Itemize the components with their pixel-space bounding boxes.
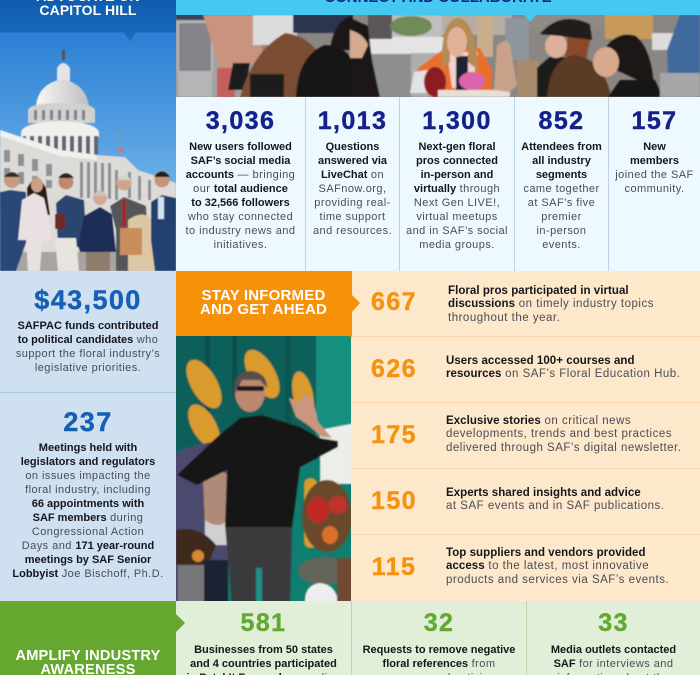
row: 115	[372, 547, 669, 586]
description: developments, trends and best practices	[446, 428, 672, 440]
description: Users accessed 100+ courses and	[446, 355, 635, 367]
number: 667	[371, 288, 417, 316]
description	[521, 141, 602, 251]
description	[448, 285, 654, 324]
description: SAFPAC funds contributed	[18, 320, 158, 332]
description: SAF’s social media	[191, 155, 290, 167]
speaker raised hand	[289, 394, 332, 438]
number: 157	[632, 107, 677, 135]
description: who stay connected	[188, 211, 293, 223]
description: New	[643, 141, 666, 153]
row: 626	[351, 337, 700, 403]
number: 33	[598, 609, 629, 637]
description: Requests to remove negative	[363, 644, 515, 656]
flower arrangement	[298, 480, 353, 605]
description	[313, 141, 392, 237]
description: segments	[536, 169, 587, 181]
description: and in SAF’s social	[406, 225, 508, 237]
description: legislators and regulators	[21, 456, 155, 468]
banner background with notch	[0, 0, 176, 41]
heading text: AND GET AHEAD	[200, 301, 327, 318]
stat: $43,500	[0, 271, 176, 393]
heading text	[200, 287, 327, 318]
description: virtually through	[414, 183, 500, 195]
heading: amplify industry awareness	[0, 601, 176, 675]
number: 3,036	[206, 107, 275, 135]
stat: 852	[514, 97, 608, 271]
stat: 581	[186, 609, 341, 675]
description	[446, 415, 681, 454]
description: New users followed	[189, 141, 292, 153]
number: $43,500	[34, 285, 142, 315]
description: SAFnow.org,	[319, 183, 386, 195]
heading text: AMPLIFY INDUSTRY	[15, 648, 161, 664]
photo: attendees at banquet tables	[176, 15, 700, 97]
description: Next Gen LIVE!,	[414, 197, 500, 209]
speaker torso	[177, 415, 338, 527]
description: support the floral industry’s	[16, 348, 160, 360]
description: products and services via SAF’s events.	[446, 574, 669, 586]
description	[363, 644, 515, 675]
number: 32	[424, 609, 454, 637]
description: premier	[541, 211, 582, 223]
person 4	[78, 190, 116, 271]
description: Next-gen floral	[418, 141, 496, 153]
description	[186, 141, 295, 251]
number: 237	[63, 407, 113, 437]
description	[16, 320, 160, 374]
description: Meetings held with	[39, 442, 137, 454]
description: members	[630, 155, 679, 167]
heading banner: advocate on Capitol Hill	[0, 0, 176, 41]
number: 115	[372, 553, 416, 581]
person 2	[18, 178, 51, 271]
stat: 32	[351, 601, 526, 675]
description: time support	[320, 211, 385, 223]
row: 150	[351, 469, 700, 535]
heading text	[15, 648, 161, 675]
description	[446, 355, 680, 380]
description: legislative priorities.	[35, 362, 141, 374]
description: Top suppliers and vendors provided	[446, 547, 646, 559]
cyan heading band	[176, 0, 700, 22]
description: in-person and	[421, 169, 493, 181]
heading text: STAY INFORMED	[201, 287, 326, 304]
description: floral industry, including	[25, 484, 151, 496]
arrow: green pointer	[176, 614, 185, 632]
description: in-person	[537, 225, 586, 237]
description: Experts shared insights and advice	[446, 487, 641, 499]
description: access to the latest, most innovative	[446, 560, 649, 572]
banner heading text: CAPITOL HILL	[39, 2, 137, 18]
description: 66 appointments with	[32, 498, 144, 510]
description: providing real-	[314, 197, 391, 209]
description: Congressional Action	[32, 526, 144, 538]
description: Questions	[326, 141, 379, 153]
description: discussions on timely industry topics	[448, 298, 654, 310]
panel: connect and collaborate	[176, 0, 700, 271]
description: floral references from	[383, 658, 495, 670]
person 5	[110, 175, 155, 271]
description: meetings by SAF Senior	[25, 554, 151, 566]
stat: 157	[608, 97, 700, 271]
description: LiveChat on	[321, 169, 384, 181]
band background with notch	[176, 0, 700, 22]
description: Exclusive stories on critical news	[446, 415, 631, 427]
number: 1,013	[318, 107, 387, 135]
person 6	[151, 172, 176, 271]
description: Floral pros participated in virtual	[448, 285, 629, 297]
description: to 32,566 followers	[191, 197, 290, 209]
panel: amplify stats	[176, 601, 700, 675]
description: delivered through SAF’s digital newsletter.	[446, 442, 681, 454]
stat: 3,036	[186, 107, 295, 251]
description: our total audience	[193, 183, 288, 195]
description	[406, 141, 508, 251]
description: to industry news and	[186, 225, 295, 237]
panel: advocate on Capitol Hill	[0, 0, 176, 271]
heading: stay informed and get ahead	[176, 271, 351, 336]
description: Media outlets contacted	[551, 644, 676, 656]
description: on issues impacting the	[25, 470, 151, 482]
number: 581	[241, 609, 286, 637]
description: and 4 countries participated	[190, 658, 337, 670]
photo: Capitol building with group	[0, 32, 176, 271]
description	[186, 644, 341, 675]
stat: 1,300	[399, 97, 514, 271]
description: accounts — bringing	[186, 169, 295, 181]
panel: informed stats list	[351, 271, 700, 601]
description	[12, 442, 164, 580]
panel: advocacy stats	[0, 271, 176, 601]
description: virtual meetups	[416, 211, 498, 223]
description: joined the SAF	[615, 169, 694, 181]
number: 626	[371, 355, 417, 383]
description: to political candidates who	[18, 334, 158, 346]
description: throughout the year.	[448, 312, 560, 324]
stat: 33	[526, 601, 700, 675]
description: Businesses from 50 states	[194, 644, 333, 656]
description: media groups.	[419, 239, 495, 251]
number: 175	[371, 421, 417, 449]
description	[446, 487, 664, 512]
description: at SAF events and in SAF publications.	[446, 500, 664, 512]
stat: 237	[12, 407, 164, 580]
number: 1,300	[422, 107, 492, 135]
description: pros connected	[416, 155, 498, 167]
description: answered via	[318, 155, 387, 167]
description: and resources.	[313, 225, 392, 237]
description	[615, 141, 694, 195]
description: SAF for interviews and	[554, 658, 673, 670]
row: 175	[351, 403, 700, 469]
description: events.	[542, 239, 581, 251]
description: community.	[625, 183, 684, 195]
person 3	[55, 173, 86, 271]
description: SAF members during	[33, 512, 143, 524]
stat: 1,013	[305, 97, 399, 271]
description: Attendees from	[521, 141, 602, 153]
description: Lobbyist Joe Bischoff, Ph.D.	[12, 568, 164, 580]
description	[446, 547, 669, 586]
description: initiatives.	[214, 239, 267, 251]
number: 150	[371, 487, 417, 515]
description	[551, 644, 676, 675]
arrow: orange pointer into list	[350, 271, 360, 337]
description: all industry	[532, 155, 591, 167]
description: Days and 171 year-round	[22, 540, 154, 552]
description: resources on SAF’s Floral Education Hub.	[446, 368, 680, 380]
description: came together	[523, 183, 600, 195]
row: 667	[351, 271, 700, 337]
photo: speaker on stage	[176, 336, 351, 601]
person 1	[0, 172, 27, 271]
number: 852	[539, 107, 584, 135]
speaker head	[234, 371, 267, 412]
description: at SAF’s five	[528, 197, 595, 209]
